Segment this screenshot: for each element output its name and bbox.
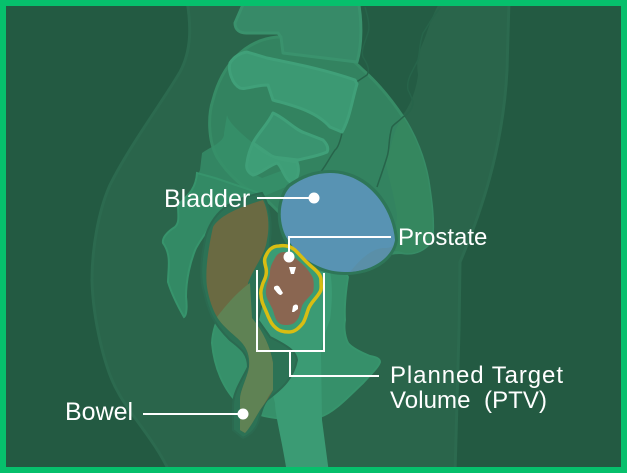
label: Bowel: Bowel xyxy=(65,398,133,426)
ischium left flange xyxy=(163,173,262,317)
label: Bowel xyxy=(65,398,248,426)
label: Planned Target Volume: Volume (PTV) xyxy=(390,387,547,414)
bladder outline xyxy=(278,170,398,275)
tissue contour lines xyxy=(300,7,440,187)
large pelvis bone xyxy=(195,37,433,270)
third vertebra xyxy=(253,113,328,160)
iliac wing overlay xyxy=(195,115,297,197)
prostate xyxy=(266,252,314,325)
label: Bladder xyxy=(164,185,320,213)
bowel overlap with pelvis xyxy=(217,283,273,433)
label: Prostate xyxy=(284,224,487,262)
bladder xyxy=(281,173,395,272)
label: Planned Target Volume xyxy=(257,270,563,414)
bowel xyxy=(206,200,273,433)
bladder lower-right overlap xyxy=(345,244,394,272)
label: Prostate: Prostate xyxy=(398,224,487,251)
pelvis right band xyxy=(385,117,433,253)
PTV outline xyxy=(261,246,321,332)
coccyx block xyxy=(247,143,298,183)
seeds xyxy=(274,267,298,312)
body silhouette xyxy=(92,0,509,473)
lower pelvis and pubic bone xyxy=(212,262,380,473)
top vertebra xyxy=(235,0,361,62)
PTV and prostate xyxy=(261,246,321,332)
sacrum and vertebrae xyxy=(229,0,361,183)
pubic shaft xyxy=(252,272,332,473)
bowel tube outline xyxy=(201,193,297,438)
label: Planned Target Volume: Planned Target xyxy=(390,362,563,389)
second vertebra xyxy=(229,52,357,132)
label: Bladder: Bladder xyxy=(164,185,250,213)
dark wedge behind sacrum xyxy=(320,0,441,170)
